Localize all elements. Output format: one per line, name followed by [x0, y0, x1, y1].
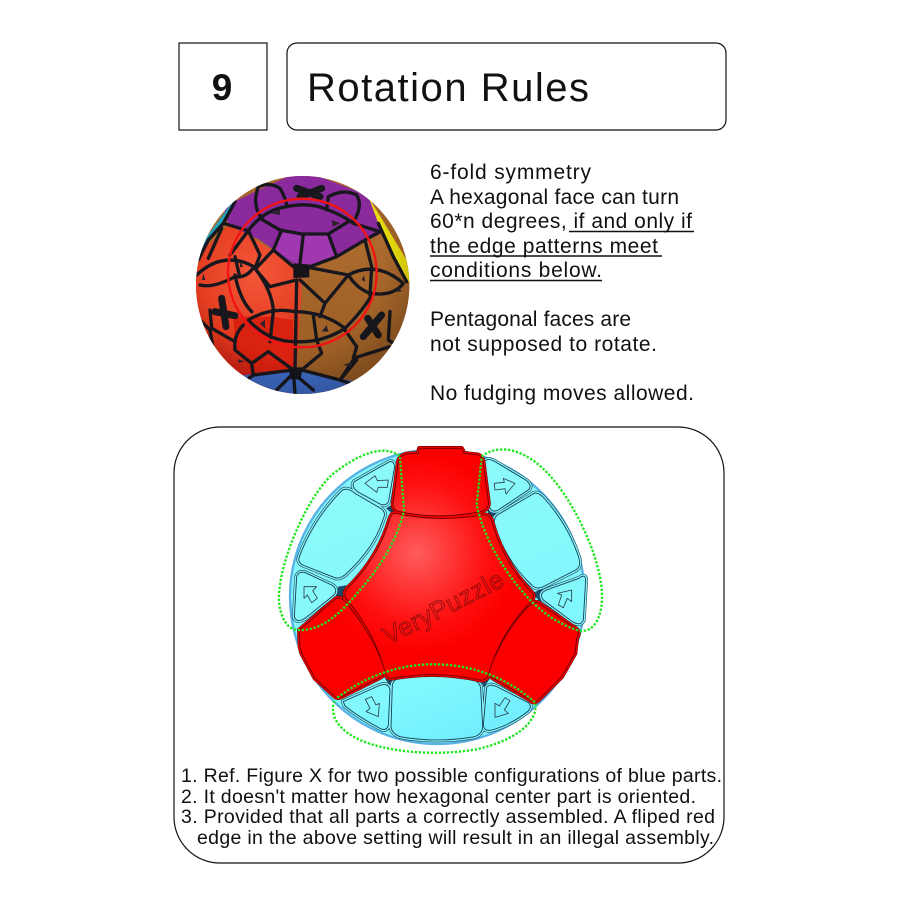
green dotted outlines	[279, 449, 602, 753]
description text: A hexagonal face can turn	[430, 186, 679, 209]
rules text: 1. Ref. Figure X for two possible configurations of blue parts.	[181, 765, 722, 787]
brand text VeryPuzzle: VeryPuzzle	[378, 566, 508, 650]
description text: the edge patterns meet	[430, 235, 658, 258]
description text: No fudging moves allowed.	[430, 382, 694, 405]
description text: conditions below.	[430, 259, 602, 282]
photo: puzzle ball with red circle	[196, 176, 410, 394]
description text: not supposed to rotate.	[430, 333, 657, 356]
blue tiles	[294, 459, 586, 740]
hub	[293, 263, 309, 278]
red highlighted circle	[228, 199, 377, 347]
title: Rotation Rules	[307, 66, 589, 110]
step number box: 9	[212, 67, 232, 108]
panel: rules	[174, 427, 724, 863]
sphere body	[290, 449, 585, 744]
small triangle marks	[202, 210, 402, 367]
rules text: 3. Provided that all parts a correctly assembled. A fliped red	[181, 806, 715, 828]
red parts	[299, 448, 578, 702]
step number box	[179, 43, 267, 130]
description text	[430, 161, 694, 405]
description text: 60*n degrees, if and only if	[430, 210, 692, 233]
description text: 6-fold symmetry	[430, 161, 592, 184]
rules text: edge in the above setting will result in an illegal assembly.	[197, 827, 714, 849]
rules text: 2. It doesn't matter how hexagonal center part is oriented.	[181, 786, 696, 808]
diagram: sphere with red and blue edge parts	[279, 448, 602, 753]
seams	[256, 185, 359, 222]
tile arrows	[304, 476, 572, 717]
title	[287, 43, 726, 130]
rules text	[181, 765, 722, 849]
description text: Pentagonal faces are	[430, 308, 631, 331]
cross marks	[297, 188, 322, 197]
